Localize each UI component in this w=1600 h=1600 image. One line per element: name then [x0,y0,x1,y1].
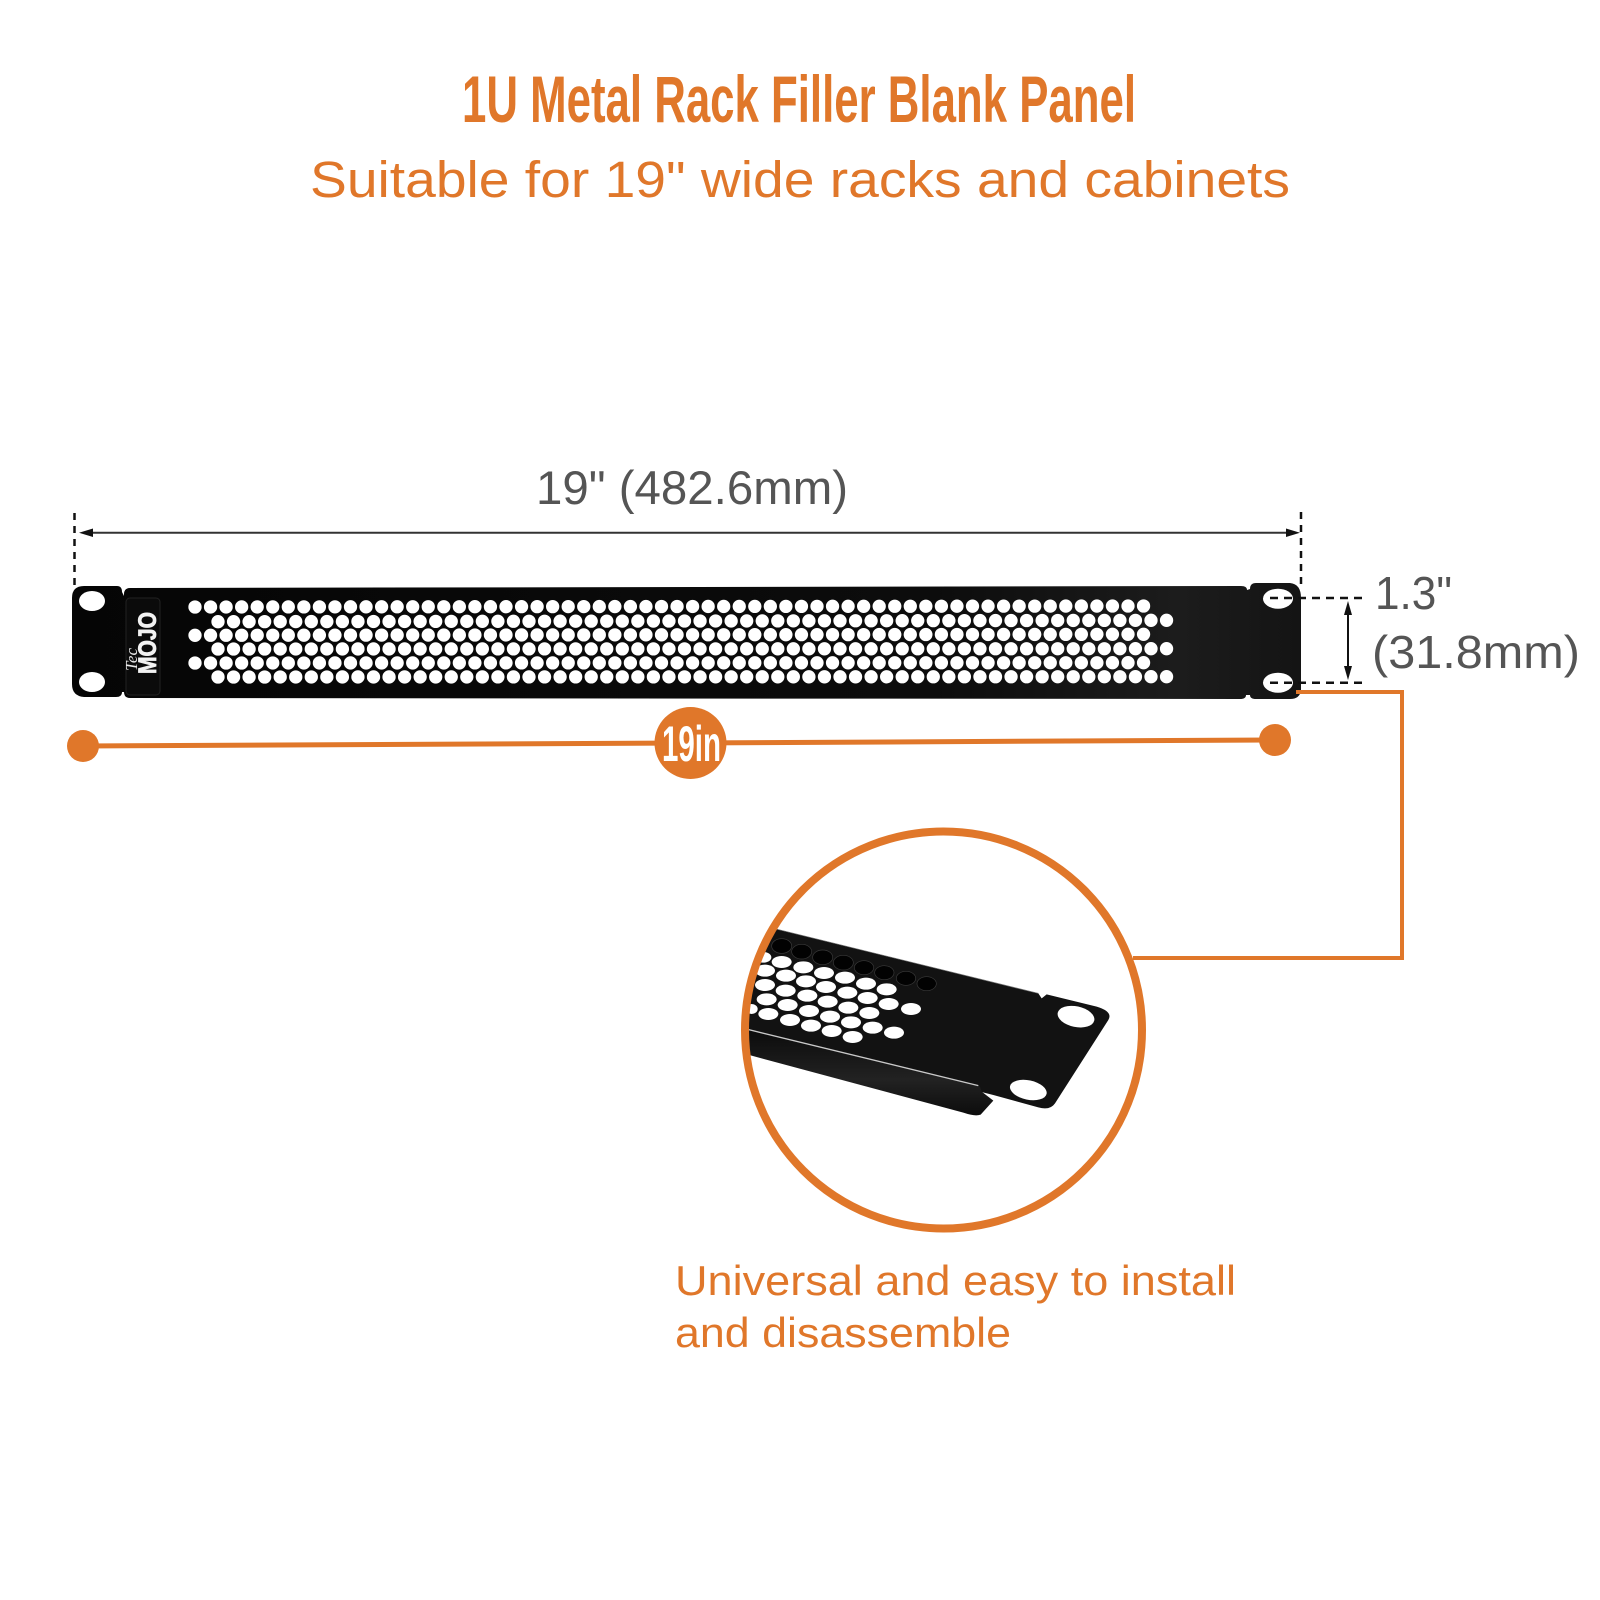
detail photo callout [737,832,1142,1228]
mounting holes [79,589,1293,693]
subtitle: Suitable for 19" wide racks and cabinets [310,151,1290,208]
rack panel [72,583,1301,699]
panel close-up [737,917,1109,1115]
height dimension marker [1270,598,1366,683]
title: 1U Metal Rack Filler Blank Panel [462,62,1136,136]
infographic [67,74,1577,1348]
callout caption: Universal and easy to install [675,1257,1236,1304]
logo plate: MOJO [134,612,162,674]
perforation grid [195,606,1169,677]
callout connector [1133,692,1402,958]
callout caption: and disassemble [675,1309,1011,1356]
19in badge [654,707,726,779]
width dimension label: 19" (482.6mm) [536,461,848,514]
magnifier ring [745,832,1142,1228]
height dimension label [1372,567,1580,678]
height dimension label: 1.3" [1375,567,1452,619]
19in badge: 19in [662,716,721,772]
logo plate: Tec [122,648,141,671]
logo plate [122,598,162,695]
orange 19in scale [67,707,1291,779]
width dimension arrow [74,512,1301,588]
height dimension label: (31.8mm) [1372,626,1580,678]
panel body [72,583,1301,699]
callout caption [675,1257,1236,1356]
